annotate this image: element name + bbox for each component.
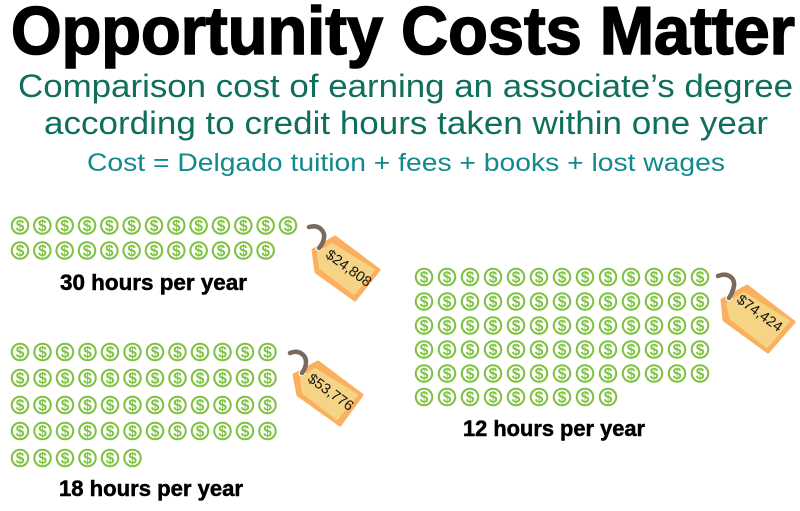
coins: 30 hours: $$$$$$$$$$$$$ [16,218,293,235]
coins: 18 hours [16,344,272,468]
price tag: $74,424: $74,424 [733,292,785,336]
panel: 30 hours per year [16,218,379,300]
coins: 30 hours: $$$$$$$$$$$$ [16,243,270,260]
coins: 18 hours: $$$$$$ [16,450,137,468]
cost formula: Cost = Delgado tuition + fees + books + lost wages [87,149,725,177]
panel: 12 hours per year [420,270,794,441]
coins: 12 hours [420,270,705,406]
price tag: $74,424 [718,275,794,352]
coins: 30 hours [16,218,293,260]
price tag: $53,776 [290,352,362,425]
label: 12 hours: 12 hours per year [463,416,645,441]
coins: 18 hours: $$$$$$$$$$$$ [16,370,272,388]
price tag: $24,808 [309,226,379,300]
label: 30 hours: 30 hours per year [60,270,247,295]
coins: 18 hours: $$$$$$$$$$$$ [16,398,272,414]
coins: 12 hours: $$$$$$$$$ [420,390,613,406]
price tag: $53,776: $53,776 [304,371,356,415]
price tag: $24,808: $24,808 [322,247,374,291]
coins: 18 hours: $$$$$$$$$$$$ [16,344,272,362]
coins: 18 hours: $$$$$$$$$$$$ [16,424,272,440]
subtitle: Comparison cost of earning an associate’s degree [18,68,793,104]
coins: 12 hours: $$$$$$$$$$$$$ [420,318,705,335]
label: 18 hours: 18 hours per year [59,476,243,501]
panel: 18 hours per year [16,344,362,501]
subtitle [18,68,793,141]
coins: 12 hours: $$$$$$$$$$$$$ [420,294,705,311]
coins: 12 hours: $$$$$$$$$$$$$ [420,366,705,383]
subtitle: according to credit hours taken within one year [44,105,768,141]
coins: 12 hours: $$$$$$$$$$$$$ [420,270,705,286]
coins: 12 hours: $$$$$$$$$$$$$ [420,342,705,359]
